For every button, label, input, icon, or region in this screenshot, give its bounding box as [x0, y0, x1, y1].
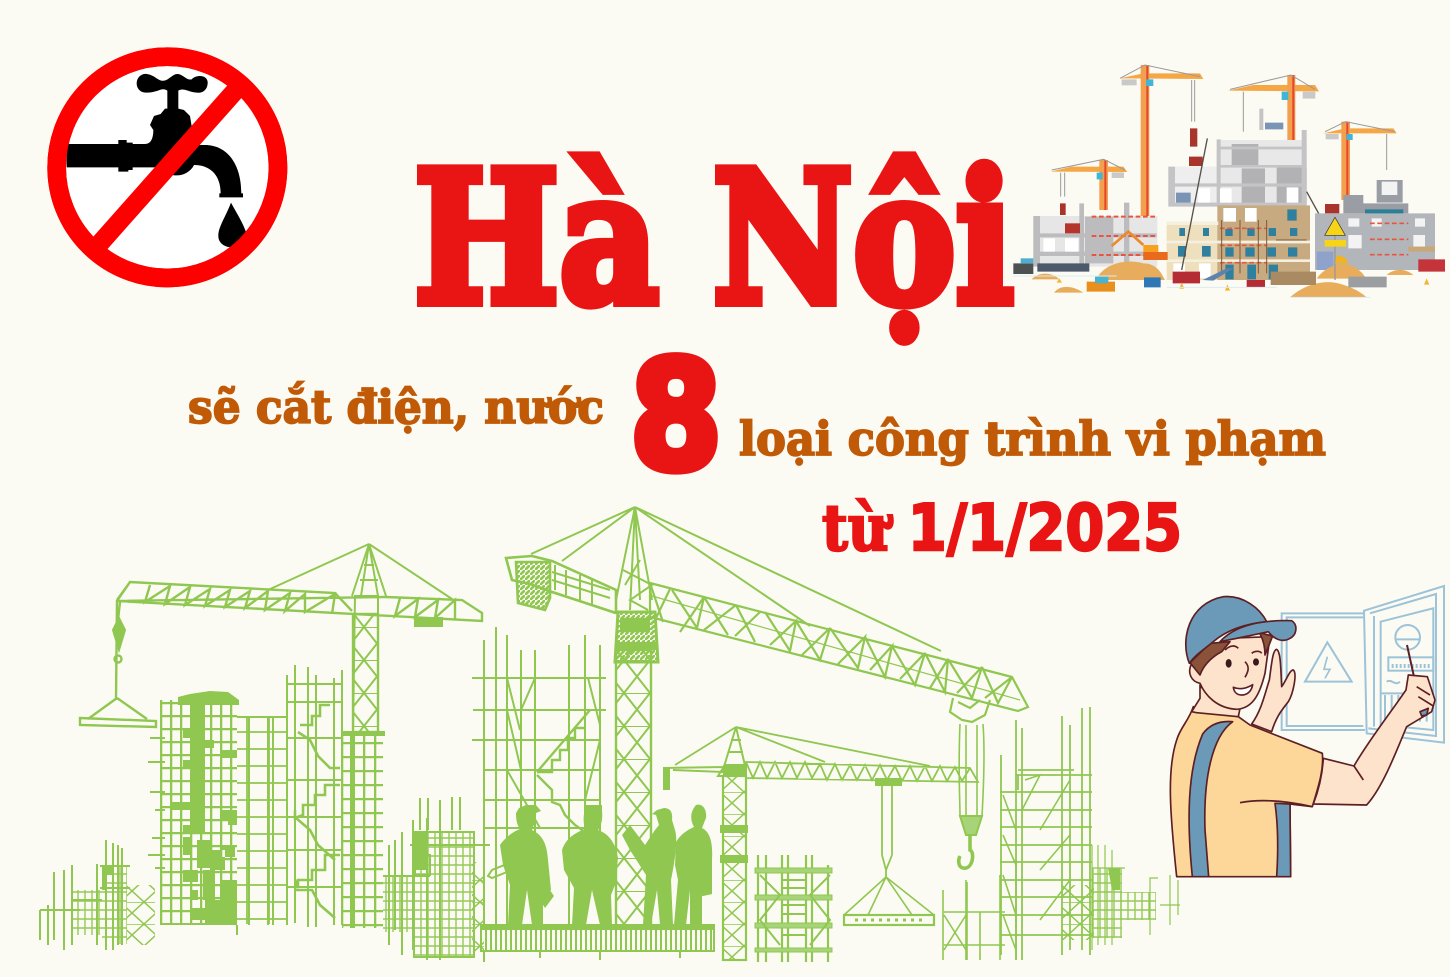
- right scaffolding: [1000, 707, 1092, 960]
- stair scaffold: [287, 665, 342, 927]
- workers on platform: [488, 805, 712, 925]
- vehicles and equipment: [1013, 217, 1429, 297]
- big number 8: 8: [630, 330, 722, 504]
- lower centre scaffold: [755, 855, 832, 962]
- right building: [1315, 180, 1445, 272]
- small buildings far right: [1062, 845, 1180, 950]
- title: Hà Nội: [414, 131, 1014, 345]
- illustration: electrician at electrical cabinet: [1170, 586, 1444, 877]
- man's body and shirt: [1170, 707, 1323, 877]
- left tower crane: [80, 544, 482, 733]
- low buildings near workers: [383, 797, 490, 960]
- centre building: [1167, 109, 1325, 280]
- electrical cabinet: [1282, 586, 1444, 743]
- left tower block: [148, 691, 239, 925]
- small buildings far left: [40, 840, 155, 950]
- tower cranes: [1051, 65, 1397, 247]
- small scaffolding bottom: [943, 860, 1016, 960]
- illustration: green line drawing of construction site: [40, 507, 1180, 962]
- illustration: colour construction site: [1013, 65, 1445, 297]
- second tower crane: [663, 727, 978, 960]
- left building: [1033, 203, 1157, 267]
- icon: no water tap prohibition sign: [57, 57, 278, 278]
- central scaffold: [472, 627, 606, 925]
- subtitle: second part: loại công trình vi phạm: [739, 412, 1326, 467]
- man's raised hand: [1252, 649, 1295, 732]
- date line: từ 1/1/2025: [822, 491, 1182, 566]
- man's arm with screwdriver: [1313, 645, 1435, 805]
- man's head: [1186, 597, 1296, 717]
- platform: [481, 925, 714, 962]
- subtitle: first part: sẽ cắt điện, nước: [188, 380, 604, 434]
- second building: [237, 717, 288, 935]
- sand piles: [1032, 261, 1413, 297]
- building under left crane: [341, 731, 385, 928]
- main tower crane: [506, 507, 1028, 928]
